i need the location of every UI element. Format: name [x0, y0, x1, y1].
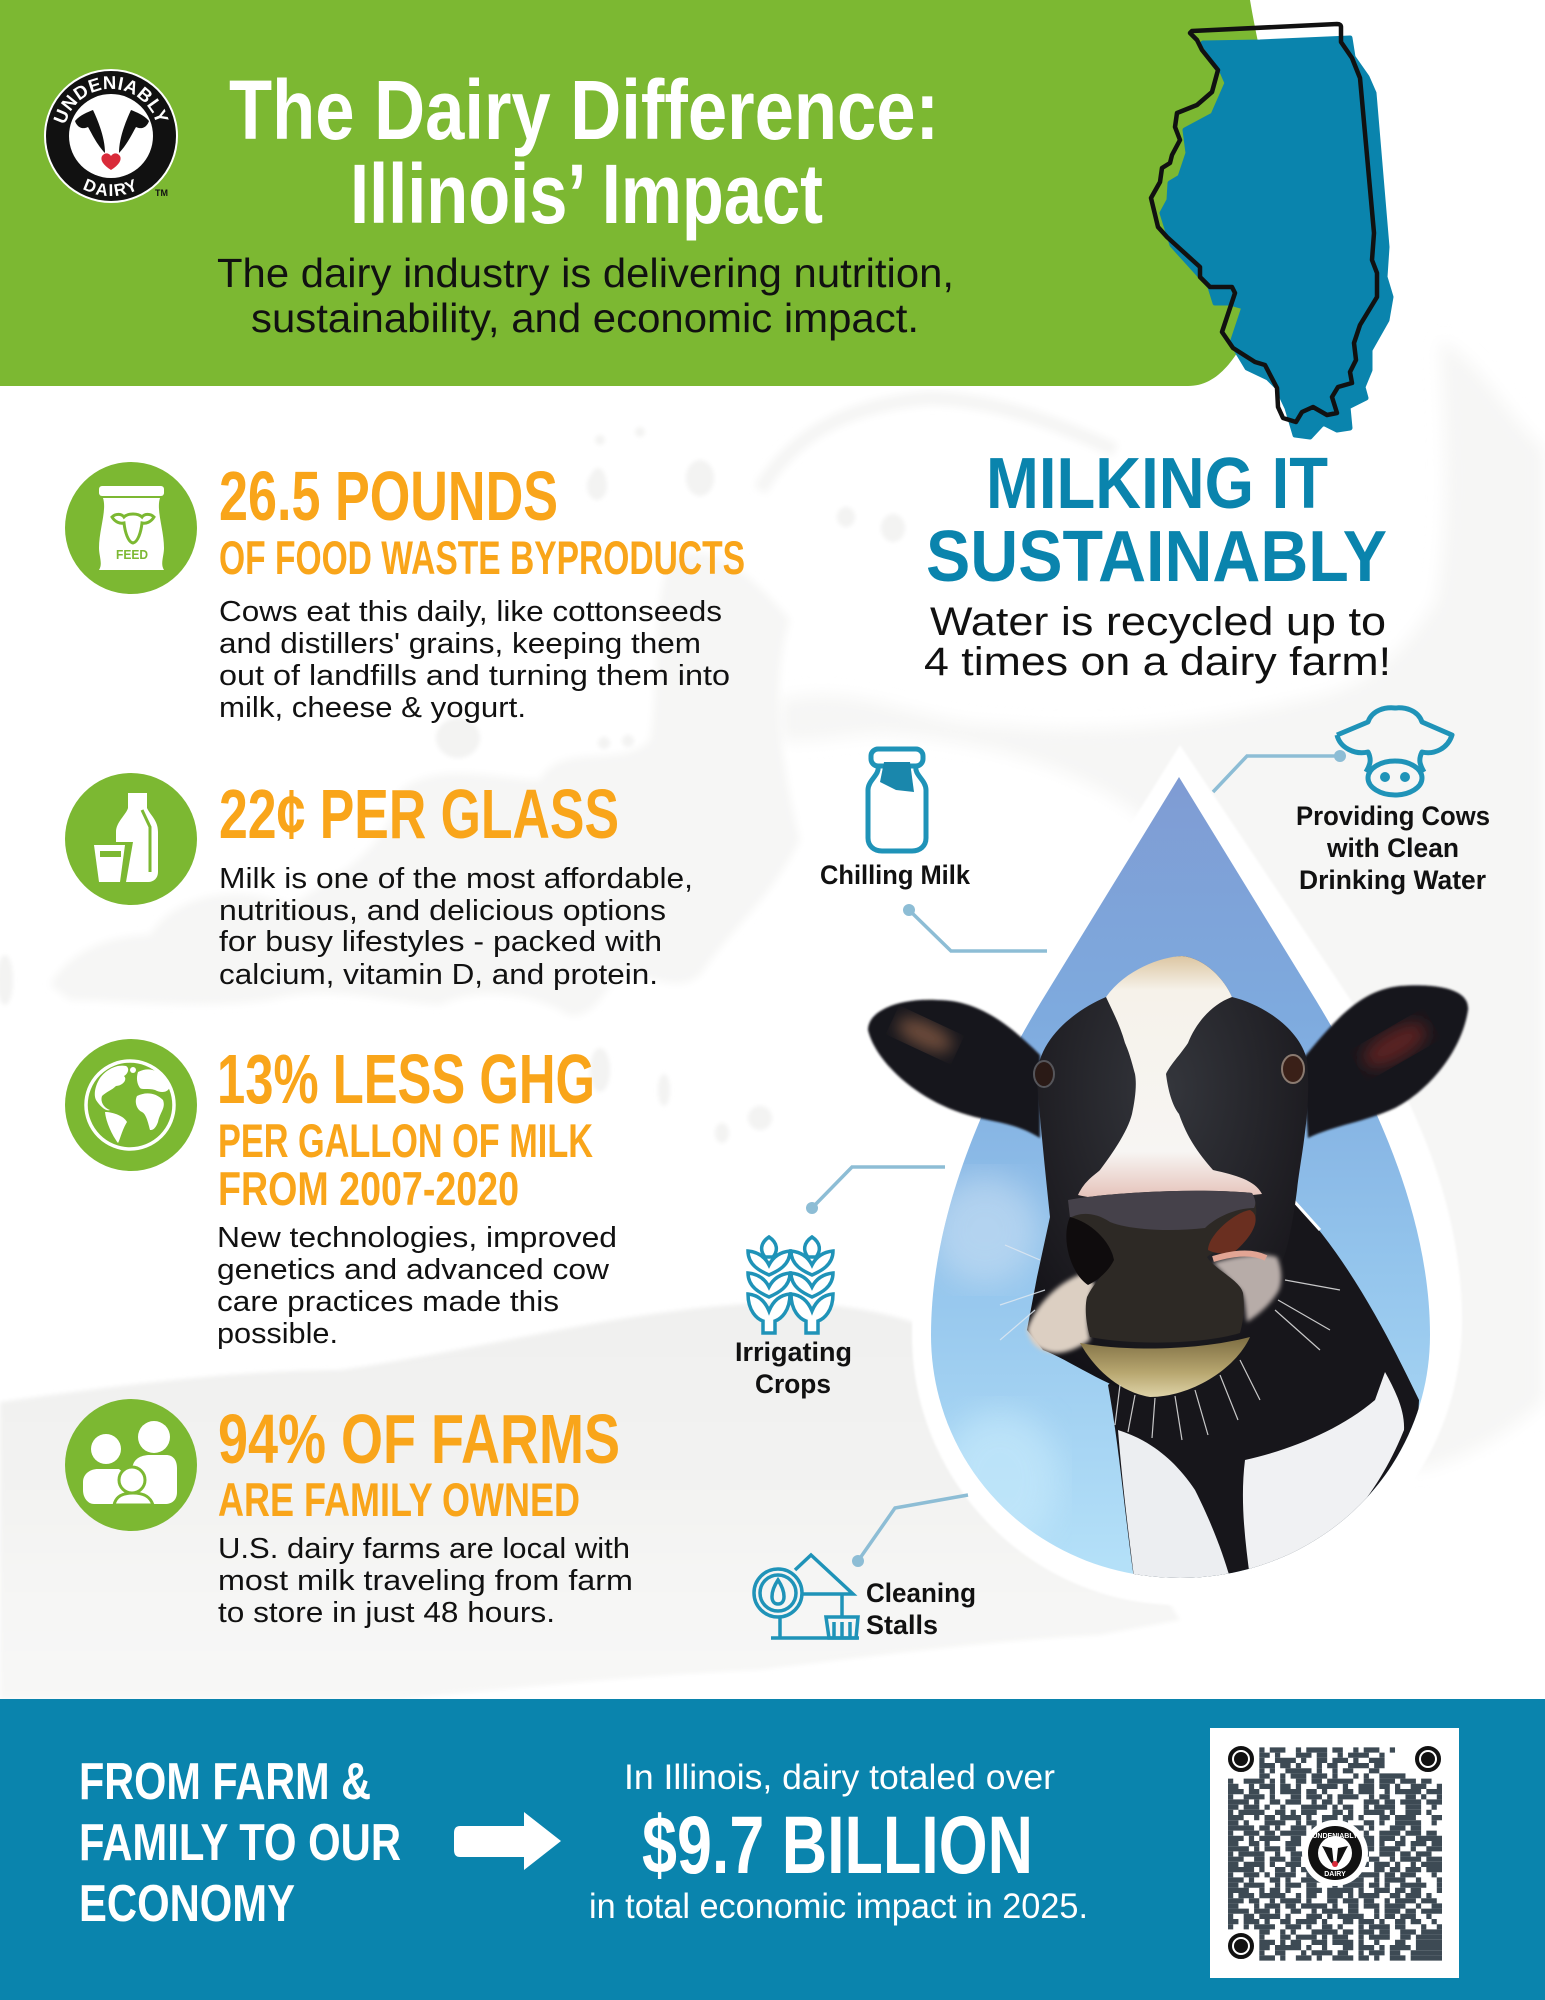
body text: nutritious, and delicious options [219, 895, 666, 927]
economic impact figure: $9.7 BILLION [642, 1800, 1033, 1891]
footer headline: FROM FARM & [79, 1753, 371, 1811]
icon: wheat [748, 1237, 833, 1333]
photo: cow in water drop [868, 745, 1468, 1605]
economic impact caption: in total economic impact in 2025. [589, 1887, 1088, 1926]
logo: Undeniably Dairy [44, 69, 178, 203]
stat heading: 22¢ PER GLASS [219, 775, 619, 853]
icon: stall with broom [754, 1555, 859, 1638]
icon: Illinois state map [1151, 24, 1391, 437]
label: clean drinking water: Providing Cows [1296, 801, 1490, 831]
footer headline: ECONOMY [79, 1875, 295, 1933]
title: The Dairy Difference: [229, 63, 939, 157]
panel: greenhouse gas stat [65, 1039, 617, 1350]
label: cleaning stalls [754, 1555, 976, 1640]
footer headline [79, 1753, 401, 1933]
body text: for busy lifestyles - packed with [219, 926, 662, 958]
panel: economy footer [0, 1699, 1545, 2000]
nostrils [1066, 1217, 1114, 1285]
QR finder marks [1226, 1744, 1444, 1962]
icon: milk bottle [868, 749, 926, 851]
heading: milking it sustainably [926, 444, 1387, 597]
body text: to store in just 48 hours. [218, 1597, 555, 1629]
cow face markings [75, 110, 149, 153]
stat heading: 13% LESS GHG [217, 1040, 595, 1118]
panel: family farms stat [65, 1399, 633, 1629]
milk splash background [0, 340, 1545, 1699]
stat subheading: PER GALLON OF MILK [218, 1114, 593, 1167]
body text: most milk traveling from farm [218, 1565, 633, 1597]
panel: green header [0, 0, 1268, 386]
label: chilling milk [820, 749, 971, 890]
subtitle: sustainability, and economic impact. [251, 295, 919, 341]
drop sky and body [925, 770, 1435, 1585]
body text: and distillers' grains, keeping them [219, 628, 701, 660]
icon: cow head outline [1337, 708, 1452, 795]
nose [1068, 1191, 1256, 1343]
subtitle: The dairy industry is delivering nutrition, [217, 250, 954, 296]
logo top lettering: UNDENIABLY [53, 76, 169, 123]
QR code [1210, 1728, 1459, 1978]
eyes [1034, 1061, 1054, 1087]
QR center logo [1302, 1820, 1368, 1886]
label: clean drinking water [1296, 708, 1490, 895]
body text [218, 1533, 633, 1629]
water recycling text: 4 times on a dairy farm! [924, 640, 1391, 684]
label: irrigating crops: Crops [755, 1369, 831, 1399]
label: cleaning stalls: Cleaning [866, 1578, 976, 1608]
drop halo [912, 745, 1462, 1605]
label: clean drinking water: with Clean [1326, 833, 1459, 863]
heading: milking it sustainably: MILKING IT [986, 444, 1328, 524]
icon: feed bag: FEED [116, 547, 148, 562]
white blaze [1078, 956, 1262, 1201]
QR center logo: UNDENIABLY [1312, 1833, 1358, 1840]
connector: chilling milk [903, 904, 1047, 951]
connector: irrigating crops [806, 1167, 945, 1214]
title: Illinois’ Impact [350, 147, 823, 241]
heart nose [101, 153, 121, 170]
trademark: TM [155, 188, 168, 198]
label: irrigating crops [735, 1237, 852, 1399]
label: chilling milk: Chilling Milk [820, 860, 971, 890]
stat heading: 26.5 POUNDS [219, 457, 558, 535]
water recycling text [924, 600, 1391, 684]
label: cleaning stalls: Stalls [866, 1610, 938, 1640]
stat subheading: FROM 2007-2020 [218, 1162, 519, 1215]
body text: U.S. dairy farms are local with [218, 1533, 630, 1565]
body text: out of landfills and turning them into [219, 660, 730, 692]
panel: price per glass stat [65, 773, 693, 991]
body text: Cows eat this daily, like cottonseeds [219, 596, 722, 628]
icon: feed bag [65, 462, 197, 594]
icon: milk bottle and glass [65, 773, 197, 905]
title [229, 63, 939, 241]
label: clean drinking water: Drinking Water [1299, 865, 1486, 895]
QR center logo: DAIRY [1324, 1871, 1346, 1878]
chin [1080, 1337, 1250, 1397]
footer headline: FAMILY TO OUR [79, 1814, 401, 1872]
heading: milking it sustainably: SUSTAINABLY [926, 517, 1387, 597]
left ear [868, 1000, 1040, 1138]
body text: care practices made this [217, 1286, 559, 1318]
logo bottom lettering: DAIRY [83, 178, 134, 196]
cow head [1027, 956, 1308, 1397]
water recycling text: Water is recycled up to [930, 600, 1386, 644]
right ear [1302, 985, 1468, 1138]
connector: cleaning stalls [852, 1495, 968, 1567]
body text [219, 596, 730, 724]
body text [217, 1222, 617, 1350]
stat subheading: ARE FAMILY OWNED [218, 1473, 580, 1526]
icon: family [65, 1399, 197, 1531]
panel: food waste stat [65, 457, 745, 724]
economic impact text: In Illinois, dairy totaled over [624, 1758, 1055, 1797]
whiskers [1000, 1245, 1340, 1440]
arrow [454, 1812, 561, 1870]
icon: globe [65, 1039, 197, 1171]
subtitle [217, 250, 954, 341]
stat subheading: OF FOOD WASTE BYPRODUCTS [219, 531, 745, 584]
body text: milk, cheese & yogurt. [219, 692, 526, 724]
connector: drinking water [1213, 750, 1346, 792]
stat heading: 94% OF FARMS [218, 1400, 620, 1478]
body text: calcium, vitamin D, and protein. [219, 959, 658, 991]
body text: New technologies, improved [217, 1222, 617, 1254]
body text: Milk is one of the most affordable, [219, 863, 693, 895]
body text: possible. [217, 1318, 338, 1350]
muzzle sides [1027, 1273, 1095, 1353]
body text: genetics and advanced cow [217, 1254, 610, 1286]
body text [219, 863, 693, 991]
stat subheading [218, 1114, 593, 1215]
label: irrigating crops: Irrigating [735, 1337, 852, 1367]
